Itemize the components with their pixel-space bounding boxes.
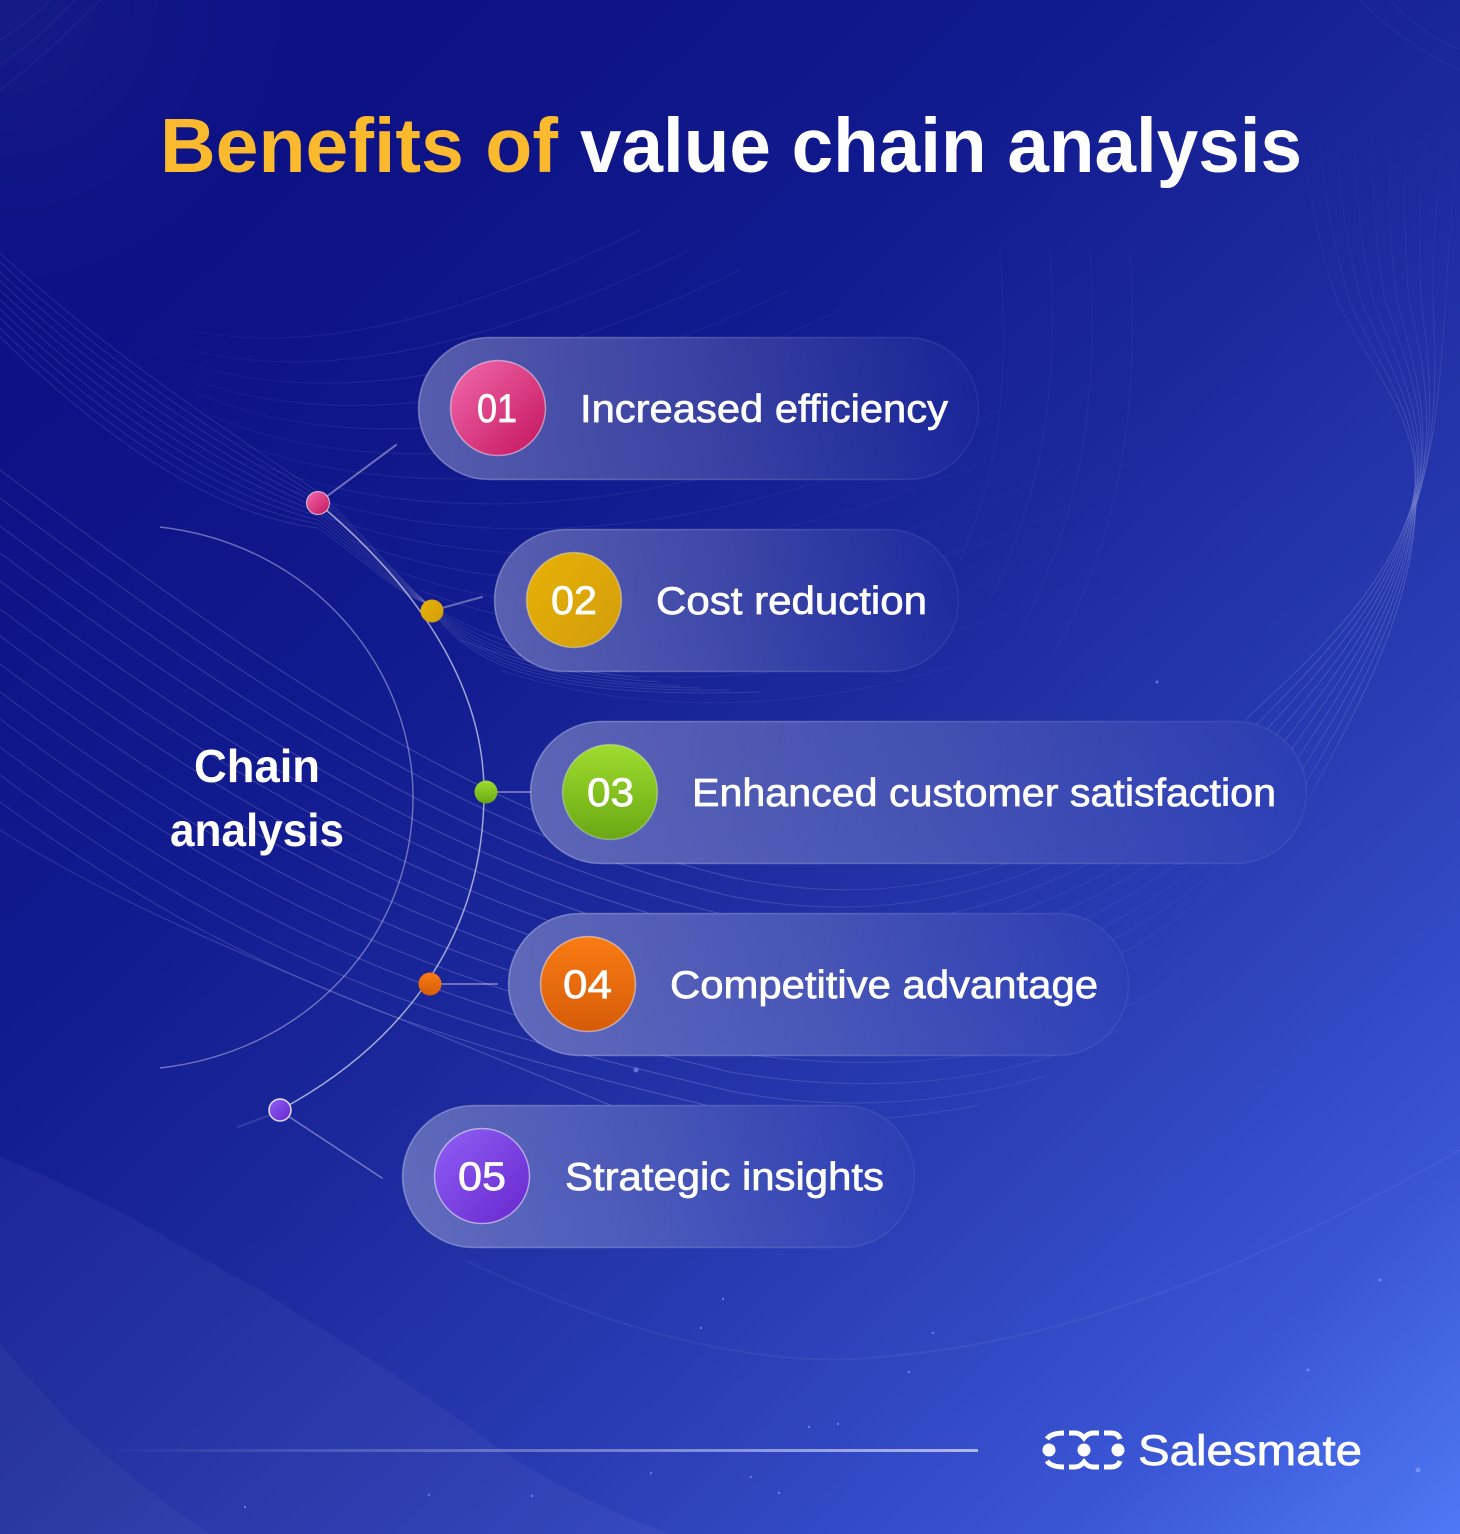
background wave xyxy=(0,1157,670,1534)
item 04 xyxy=(508,914,1128,1056)
inner arc xyxy=(160,527,413,1068)
item 04: 04 xyxy=(563,963,612,1007)
node dots xyxy=(269,492,498,1121)
background lower wave xyxy=(0,1343,210,1534)
logo xyxy=(1042,1427,1362,1475)
item 04: Competitive advantage xyxy=(670,964,1098,1007)
logo mark xyxy=(1042,1433,1124,1467)
item 01: 01 xyxy=(477,387,517,431)
item 01: Increased efficiency xyxy=(580,388,949,431)
item 05: 05 xyxy=(458,1155,506,1199)
logo wordmark: Salesmate xyxy=(1138,1427,1362,1475)
label: chain analysis: Chain xyxy=(194,740,320,792)
item 03: 03 xyxy=(587,771,634,815)
item 02 xyxy=(494,530,958,672)
title xyxy=(160,103,1302,189)
item 02: 02 xyxy=(551,579,597,623)
footer rule xyxy=(100,1449,978,1452)
connectors xyxy=(238,445,530,1178)
item 01 xyxy=(418,338,978,480)
title: Benefits of xyxy=(160,103,558,189)
label: chain analysis xyxy=(170,740,344,856)
background specks xyxy=(244,680,1420,1508)
item 02: Cost reduction xyxy=(656,580,927,623)
item 05: Strategic insights xyxy=(565,1156,884,1199)
item 03: Enhanced customer satisfaction xyxy=(692,772,1276,815)
outer arc xyxy=(280,503,484,1110)
item 03 xyxy=(530,722,1306,864)
label: chain analysis: analysis xyxy=(170,804,344,856)
item 05 xyxy=(402,1106,914,1248)
title: value chain analysis xyxy=(580,103,1302,189)
